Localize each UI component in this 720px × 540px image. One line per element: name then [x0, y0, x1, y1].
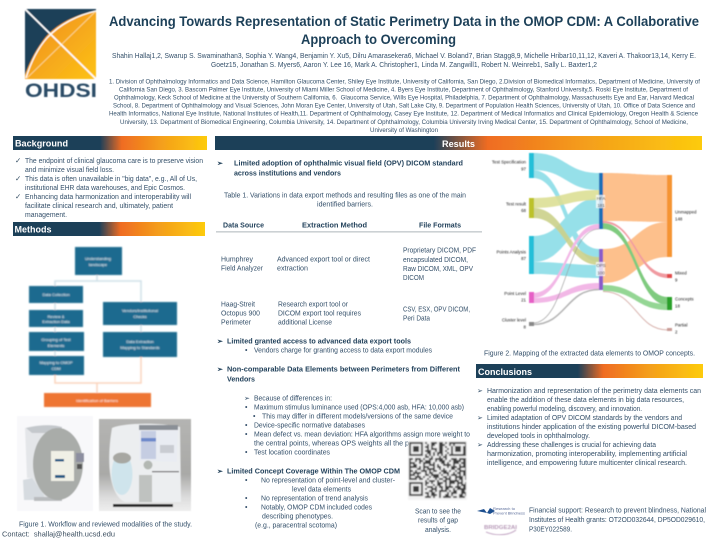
panel: conclusions	[476, 364, 703, 467]
image: perimeter device 1	[17, 416, 93, 511]
text: non-comparable data elements: Test location coordinates	[254, 450, 330, 456]
panel: methods	[13, 222, 205, 528]
chart: workflow: Grouping of Test	[41, 337, 72, 342]
text: granted access	[217, 338, 432, 354]
text: non-comparable data elements: •	[253, 414, 256, 420]
node labels: 148	[675, 216, 683, 222]
chart: workflow: landscape	[89, 262, 108, 267]
text: non-comparable data elements: •	[245, 404, 248, 412]
affiliations: Ophthalmology, Keck School of Medicine at the University of Southern California, 6. Glaucoma Service, Wills Eye Hospital, Philadelphia, 7. Department of Ophthalmology, Massachusetts Eye and Ear, Harvard Medical	[114, 94, 694, 102]
node labels: 181	[597, 203, 605, 208]
text: concept coverage	[217, 468, 400, 530]
chart: workflow: Extraction Data	[42, 319, 70, 324]
node labels: 8	[524, 324, 527, 330]
text: scan note: results of gap	[418, 518, 458, 524]
node labels	[492, 160, 697, 334]
text: granted access: •	[245, 348, 248, 354]
image: perimeter device 2	[99, 419, 191, 511]
QR code	[408, 441, 467, 500]
text: concept coverage: level data elements	[292, 486, 351, 494]
text: granted access: Vendors charge for granting access to data export modules	[254, 348, 432, 354]
table: data export methods: File Formats	[419, 222, 461, 230]
text: non-comparable data elements: Device-specific normative databases	[254, 422, 365, 430]
node labels: OPS	[596, 263, 606, 268]
text: non-comparable data elements	[217, 366, 470, 456]
node labels: 68	[521, 208, 527, 213]
logo: OHDSI: OHDSI	[25, 80, 97, 102]
node labels: Points Analysis	[496, 250, 527, 254]
chart: workflow: Mapping to Standards	[120, 345, 160, 350]
logo: research to prevent blindness: Research to	[493, 507, 515, 511]
text: scan note	[415, 508, 461, 534]
text: non-comparable data elements: ➢	[244, 396, 250, 402]
chart: workflow: Review &	[48, 314, 65, 319]
text: scan note: analysis.	[425, 527, 451, 534]
node labels: 100	[597, 270, 605, 276]
node labels: 18	[675, 304, 680, 308]
text: concept coverage: No representation of point-level and cluster-	[261, 478, 396, 484]
panel: background	[13, 136, 207, 219]
node labels: Test result	[506, 202, 527, 206]
table: data export methods: Raw DICOM, XML, OPV	[403, 266, 473, 273]
table: data export methods: Perimeter	[221, 320, 252, 326]
text: financial support: Financial support: Research to prevent blindness, National	[529, 508, 706, 514]
text: scan note: Scan to see the	[415, 508, 461, 516]
text: concept coverage: •	[245, 478, 248, 484]
node labels: 2	[675, 330, 678, 334]
node labels: Partial	[675, 322, 687, 328]
authors: Shahin Hallaj1,2, Swarup S. Swaminathan3, Sophia Y. Wang4, Benjamin Y. Xu5, Dilru Amarasekera6, Michael V. Boland7, Brian Stagg8,9, Michelle Hribar10,11,12, Kaveri A. Thakoor13,14, Kerry E.	[112, 53, 696, 60]
table: data export methods: Extraction Method	[302, 222, 367, 230]
node labels: Unmapped	[675, 210, 697, 214]
text: non-comparable data elements: •	[245, 432, 248, 438]
text: granted access: ➢	[217, 338, 224, 346]
text: background bullets: ✓	[15, 156, 21, 165]
chart: workflow: Elements	[48, 343, 64, 348]
text: concept coverage: describing phenotypes.	[262, 514, 333, 520]
authors	[112, 53, 696, 69]
text: non-comparable data elements: Mean defect vs. mean deviation: HFA algorithms assign more weight to	[254, 432, 470, 438]
logo: bridge2ai	[484, 525, 518, 535]
heading: methods	[13, 222, 205, 236]
text: background bullets	[15, 156, 203, 219]
affiliations: 1. Division of Ophthalmology Informatics and Data Science, Hamilton Glaucoma Center, Shiley Eye Institute, University of California, San Diego, 2.Division of Biomedical Informatics, Department of Medicine, University of	[109, 78, 700, 86]
text: conclusions bullets	[477, 388, 701, 467]
logo: research to prevent blindness	[477, 507, 525, 516]
text: concept coverage: No representation of trend analysis	[261, 496, 368, 502]
text: non-comparable data elements: Because of differences in:	[254, 396, 332, 402]
heading: conclusions: Conclusions	[478, 367, 532, 377]
text: conclusions bullets: ➢	[477, 442, 483, 449]
chart: workflow: Identification of Barriers	[76, 398, 118, 403]
text: conclusions bullets: Harmonization and representation of the perimetry data elements can	[487, 388, 701, 395]
table: data export methods: Field Analyzer	[221, 266, 264, 272]
text: background bullets: Enhancing data harmonization and interoperability will	[25, 194, 191, 201]
text: non-comparable data elements: •	[245, 422, 248, 430]
text: background bullets: facilitate clinical research and, ultimately, patient	[25, 203, 173, 210]
contact: Contact: shallaj@health.ucsd.edu	[2, 530, 115, 539]
caption: table 1: identified barriers.	[317, 202, 373, 208]
affiliations	[109, 78, 700, 134]
table: data export methods: Data Source	[223, 222, 264, 230]
table: data export methods: Octopus 900	[221, 310, 260, 318]
text: granted access: Limited granted access to advanced data export tools	[227, 338, 411, 346]
text: background bullets: ✓	[15, 192, 21, 201]
chart: workflow: Vendors/Institutional	[122, 308, 158, 313]
text: conclusions bullets: Addressing these challenges is crucial for achieving data	[487, 442, 656, 449]
table: data export methods: additional License	[278, 320, 332, 326]
text: conclusions bullets: developed tools in ophthalmology.	[487, 433, 590, 440]
table: data export methods: Research export tool or	[278, 302, 349, 308]
node labels: 9	[675, 278, 678, 282]
node labels: Concepts	[675, 296, 694, 302]
node labels: Test Specification	[492, 160, 527, 164]
node labels: Point Level	[504, 291, 526, 296]
table: data export methods: encapsulated DICOM,	[403, 257, 468, 264]
heading: conclusions	[476, 364, 703, 378]
authors: Goetz15, Jonathan S. Myers6, Aaron Y. Lee 16, Mark A. Christopher1, Linda M. Zangwill1, Robert N. Weinreb1, Sally L. Baxter1,2	[211, 62, 597, 69]
text: background bullets: This data is often unavailable in "big data", e.g., All of Us,	[25, 176, 197, 183]
text: conclusions bullets: intelligence, and empowering future multicenter clinical research.	[487, 460, 687, 467]
chart: workflow: CDM	[51, 366, 61, 371]
text: conclusions bullets: enable the addition of these data elements in big data resources,	[487, 397, 684, 404]
chart: workflow	[29, 247, 177, 407]
text: background bullets: The endpoint of clinical glaucoma care is to preserve vision	[25, 158, 203, 165]
heading: background: Background	[15, 139, 68, 149]
text: concept coverage: Notably, OMOP CDM included codes	[261, 504, 372, 512]
affiliations: University, 13. Department of Biomedical Engineering, Columbia University, 14. Department of Ophthalmology, Columbia University Irving Medical Center, 15. Department of Ophthalmology, School of Medicine,	[120, 119, 688, 126]
chart: workflow: Data Collection	[42, 292, 70, 297]
node labels: 97	[521, 166, 527, 172]
text: non-comparable data elements: Maximum stimulus luminance used (OPS:4,000 asb, HFA: 10,000 asb)	[254, 404, 464, 412]
logo: OHDSI	[25, 9, 97, 102]
chart: workflow: Mapping to OMOP	[39, 360, 73, 365]
title: Approach to Overcoming	[301, 31, 456, 47]
text: background bullets: and minimize visual field loss.	[25, 167, 114, 174]
affiliations: Health Informatics, National Eye Institute, National Institutes of Health,11. Department of Ophthalmology, Casey Eye Institute, 12. Department of Medical Informatics and Clinical Epidemiology, Oregon Health & Science	[109, 110, 699, 118]
table: data export methods: Haag-Streit	[221, 302, 255, 308]
logo: research to prevent blindness: Prevent Blindness	[493, 512, 525, 516]
text: financial support: P30EY022589.	[529, 526, 572, 534]
text: conclusions bullets: institutions hinder application of the existing powerful DICOM-based	[487, 424, 696, 431]
table: data export methods: Peri Data	[403, 316, 430, 322]
caption: table 1	[224, 192, 466, 208]
text: non-comparable data elements: •	[245, 450, 248, 456]
text: conclusions bullets: Limited adaptation of OPV DICOM standards by the vendors and	[487, 415, 682, 422]
node labels: HFA	[597, 196, 605, 201]
logo: bridge2ai: BRIDGE2AI	[484, 525, 518, 531]
text: concept coverage: •	[245, 504, 248, 512]
text: concept coverage: (e.g., paracentral scotoma)	[255, 522, 337, 530]
flows: intermediates to concepts	[603, 173, 668, 330]
text: background bullets: institutional EHR data warehouses, and Epic Cosmos.	[25, 185, 185, 192]
chart: sankey of data elements to OMOP concepts	[492, 153, 697, 334]
affiliations: California San Diego, 3. Bascom Palmer Eye Institute, University of Miami Miller School of Medicine, 4. Byers Eye Institute, Department of Ophthalmology, Stanford University,5. Roski Eye Institute, Department of	[119, 86, 688, 94]
caption: figure 2: Figure 2. Mapping of the extracted data elements to OMOP concepts.	[484, 350, 695, 358]
node labels: 21	[521, 298, 527, 302]
heading: background	[13, 136, 207, 150]
title	[109, 13, 699, 47]
text: conclusions bullets: ➢	[477, 388, 483, 395]
text: concept coverage: Limited Concept Coverage Within The OMOP CDM	[227, 468, 400, 476]
text: concept coverage: •	[245, 496, 248, 502]
flows: sources to intermediates	[533, 153, 599, 324]
table: data export methods: CSV, ESX, OPV DICOM,	[403, 306, 470, 314]
text: non-comparable data elements: Non-comparable Data Elements between Perimeters from Different	[227, 366, 461, 374]
text: conclusions bullets: ➢	[477, 415, 483, 422]
nodes	[529, 153, 672, 331]
chart: workflow: Checks	[133, 314, 147, 319]
text: OPV DICOM adoption: ➢	[217, 160, 224, 168]
text: OPV DICOM adoption: Limited adoption of ophthalmic visual field (OPV) DICOM standard	[234, 160, 463, 168]
panel: results text	[216, 160, 482, 530]
table: data export methods: Advanced export tool or direct	[277, 256, 370, 264]
text: conclusions bullets: harmonization, promoting interoperability, implementing artificial	[487, 451, 687, 458]
text: non-comparable data elements: ➢	[217, 366, 224, 374]
node labels: 87	[521, 256, 527, 261]
table: data export methods: DICOM export tool requires	[278, 310, 361, 318]
node labels: Cluster level	[502, 318, 526, 322]
table: data export methods	[216, 222, 482, 326]
text: non-comparable data elements: the central points, whereas OPS weights all the p	[254, 440, 409, 448]
affiliations: School, 8. Department of Ophthalmology and Visual Sciences, John Moran Eye Center, University of Utah, Salt Lake City, 9. Department of Population Health Sciences, University of Utah, 10. Office of Data Science and	[113, 102, 695, 110]
caption: table 1: Table 1. Variations in data export methods and resulting files as one of the main	[224, 192, 466, 200]
text: conclusions bullets: enabling powerful modeling, discovery, and innovation.	[487, 406, 642, 413]
chart: workflow: Data Extraction	[126, 339, 154, 344]
text: non-comparable data elements: This may differ in different models/versions of the same device	[262, 414, 453, 420]
affiliations: University of Washington	[370, 127, 438, 134]
table: data export methods: extraction	[277, 266, 308, 272]
text: OPV DICOM adoption	[217, 160, 463, 178]
caption: figure 1: Figure 1. Workflow and reviewed modalities of the study.	[19, 522, 192, 528]
text: concept coverage: ➢	[217, 468, 224, 476]
chart: workflow: Understanding	[85, 256, 111, 261]
text: background bullets: management.	[25, 212, 67, 219]
table: data export methods: DICOM	[403, 275, 424, 282]
text: background bullets: ✓	[15, 174, 21, 183]
heading: results: Results	[442, 139, 475, 149]
node labels: Mixed	[675, 270, 687, 276]
text: non-comparable data elements: Vendors	[227, 376, 255, 384]
text: OPV DICOM adoption: across institutions and vendors	[234, 170, 341, 178]
table: data export methods: Proprietary DICOM, PDF	[403, 248, 476, 254]
table: data export methods: Humphrey	[221, 256, 253, 264]
heading: results	[215, 136, 702, 150]
text: financial support: Institutes of Health grants: OT2OD032644, DP5OD029610,	[529, 517, 705, 524]
text: financial support	[529, 508, 706, 534]
heading: methods: Methods	[14, 225, 52, 235]
